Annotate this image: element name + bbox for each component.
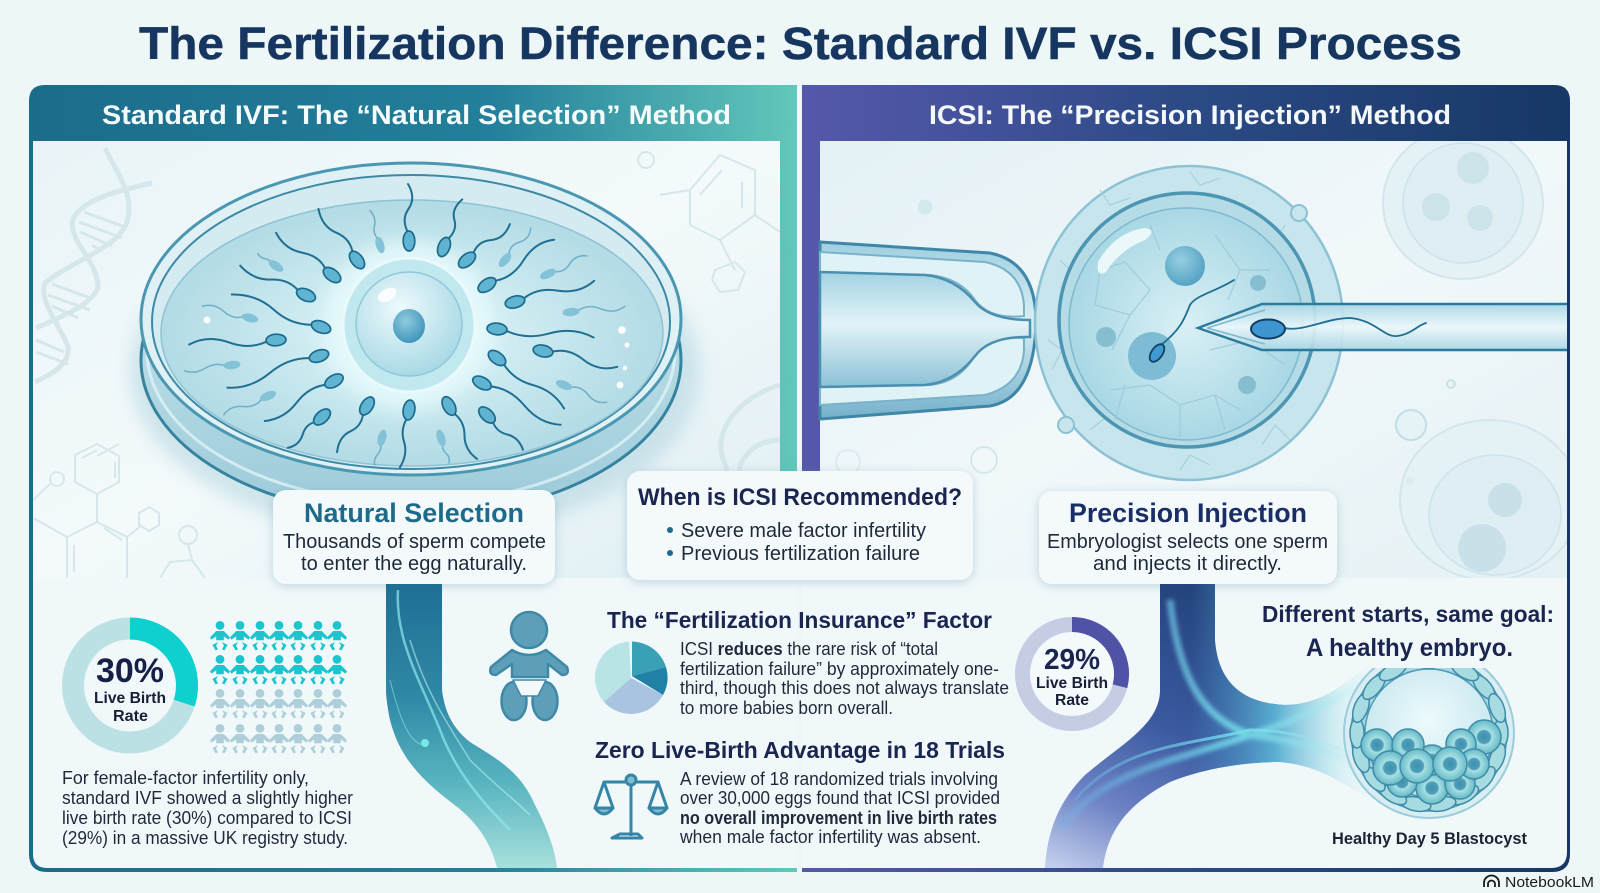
illustration background right [820, 141, 1567, 578]
nuclei [1165, 246, 1205, 286]
text: female-factor finding: live birth rate (30%) compared to ICSI [62, 808, 352, 828]
text: eighteen trials: no overall improvement in live birth rates [680, 808, 997, 828]
callout: Natural Selection: Thousands of sperm compete [283, 531, 546, 553]
donut: 29% live birth rate [1022, 624, 1122, 724]
petri dish illustration [130, 163, 700, 537]
cytoplasm texture [1095, 225, 1285, 437]
callout: When is ICSI Recommended: Severe male factor infertility [681, 520, 926, 542]
title: The Fertilization Difference: Standard IVF vs. ICSI Process [139, 18, 1462, 69]
text: eighteen trials: when male factor infertility was absent. [679, 827, 981, 847]
donut: 30% live birth rate: Live Birth [94, 690, 166, 707]
panel: standard IVF [29, 85, 797, 872]
text: eighteen trials [679, 769, 1000, 847]
icon: balance scales [595, 775, 667, 838]
callout: Precision Injection: Precision Injection [1069, 498, 1307, 528]
panel: ICSI [802, 85, 1580, 872]
heading: same goal [1262, 601, 1554, 662]
donut: 30% live birth rate: 30% [96, 652, 164, 690]
lower panel background right [802, 578, 1567, 868]
NotebookLM credit: NotebookLM [1505, 874, 1594, 891]
heading: fertilization insurance: The “Fertilization Insurance” Factor [607, 607, 992, 633]
stream light bands [1060, 600, 1372, 830]
inner cell mass [1361, 720, 1501, 804]
heading: same goal: Different starts, same goal: [1262, 601, 1554, 627]
callout: Precision Injection: Embryologist selects one sperm [1047, 531, 1328, 553]
pie chart [595, 642, 668, 714]
text: fertilization insurance: third, though this does not always translate [680, 678, 1009, 698]
caption: blastocyst: Healthy Day 5 Blastocyst [1332, 829, 1527, 848]
illustration background left [33, 141, 780, 578]
text: eighteen trials: A review of 18 randomized trials involving [680, 769, 998, 789]
panel heading: standard IVF: Standard IVF: The “Natural Selection” Method [102, 100, 731, 130]
text: female-factor finding [62, 768, 353, 848]
dish side wall [141, 203, 681, 517]
icon: baby [490, 612, 568, 720]
donut: 29% live birth rate: 29% [1044, 644, 1100, 676]
egg in dish [323, 240, 493, 410]
text: fertilization insurance: fertilization failure” by approximately one- [680, 659, 999, 679]
callout: When is ICSI Recommended [627, 471, 973, 580]
lower panel background left [33, 578, 797, 868]
callout: Precision Injection [1039, 491, 1337, 584]
sperm swarm [184, 184, 625, 468]
callout: Natural Selection: to enter the egg naturally. [301, 553, 527, 575]
sperm inside egg [1161, 280, 1234, 345]
right flow stream [1045, 584, 1372, 868]
baby pictogram grid [210, 621, 347, 753]
blastocyst illustration [1343, 668, 1515, 819]
text: female-factor finding: (29%) in a massive UK registry study. [62, 828, 348, 848]
decorative cells and bubbles [836, 127, 1580, 580]
text: female-factor finding: For female-factor infertility only, [62, 768, 309, 788]
text: fertilization insurance: ICSI reduces the rare risk of “total [680, 639, 938, 659]
callout: Natural Selection: Natural Selection [304, 498, 524, 528]
text: fertilization insurance [680, 639, 1009, 718]
holding pipette [820, 242, 1036, 419]
left flow stream [386, 584, 557, 868]
callout: Natural Selection [273, 490, 555, 584]
donut: 29% live birth rate: Rate [1055, 692, 1089, 709]
donut: 29% live birth rate: Live Birth [1036, 675, 1108, 692]
callout: When is ICSI Recommended: When is ICSI Recommended? [638, 484, 962, 511]
callout: When is ICSI Recommended: Previous fertilization failure [681, 543, 920, 565]
decorative DNA and molecules left [33, 148, 780, 578]
panel heading: ICSI: ICSI: The “Precision Injection” Method [929, 100, 1451, 130]
ICSI egg [1035, 166, 1343, 480]
injection needle [1198, 304, 1567, 350]
donut: 30% live birth rate: Rate [113, 708, 148, 725]
sperm in needle [1281, 318, 1426, 336]
trophoblast ring cells [1349, 654, 1509, 813]
text: eighteen trials: over 30,000 eggs found that ICSI provided [680, 788, 1000, 808]
text: fertilization insurance: to more babies born overall. [680, 698, 893, 718]
heading: same goal: A healthy embryo. [1306, 634, 1513, 662]
callout: Precision Injection: and injects it directly. [1093, 553, 1282, 575]
donut: 30% live birth rate [73, 628, 187, 742]
culture liquid [161, 200, 663, 466]
text: female-factor finding: standard IVF showed a slightly higher [62, 788, 353, 808]
dish rim [141, 163, 681, 475]
heading: zero live-birth advantage: Zero Live-Birth Advantage in 18 Trials [595, 737, 1005, 763]
right gutter of IVF panel [780, 141, 797, 578]
